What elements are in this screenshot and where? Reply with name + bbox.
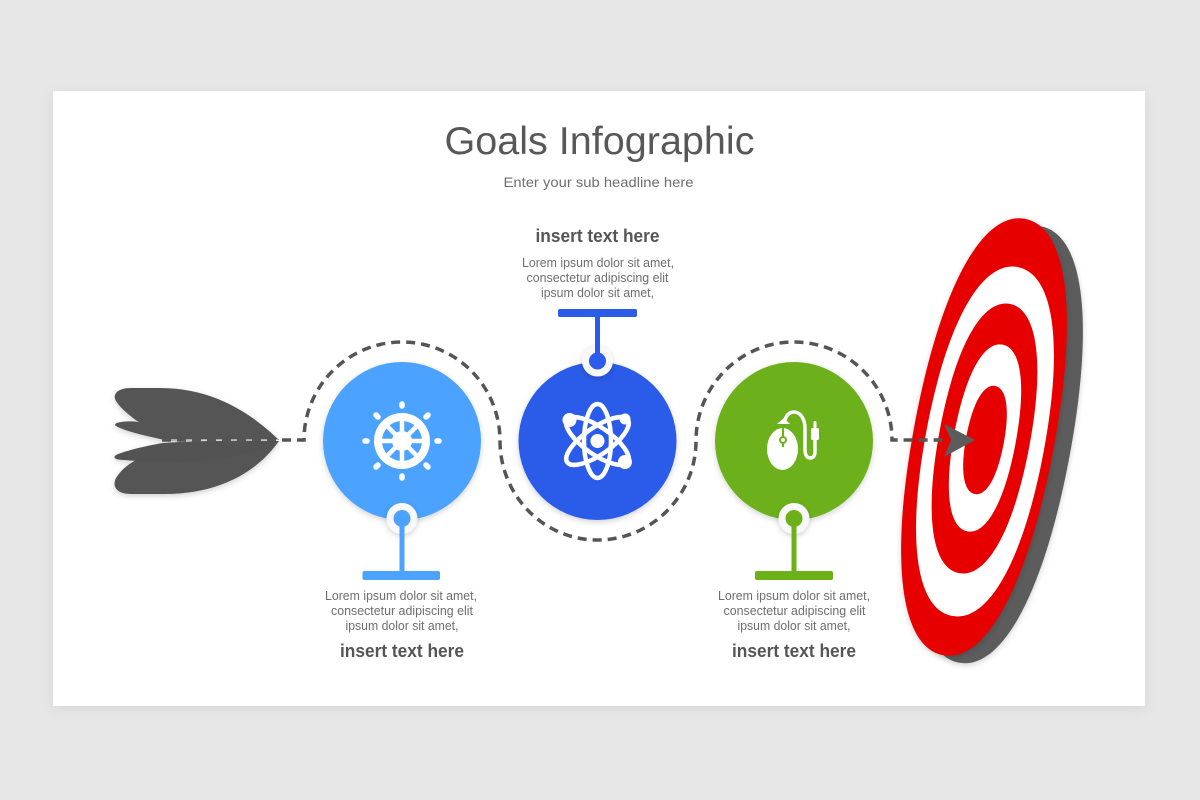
text block: left step: ipsum dolor sit amet, (346, 619, 458, 633)
icon: atom (559, 404, 636, 478)
text block: top step (522, 226, 674, 300)
text block: left step (325, 589, 477, 661)
arrowhead (944, 424, 975, 457)
connector: blue pin (362, 503, 440, 580)
circle: step three green (715, 362, 873, 520)
text block: left step: Lorem ipsum dolor sit amet, (325, 589, 477, 603)
panel: white slide card (53, 91, 1145, 706)
title: Goals Infographic (444, 120, 754, 163)
circle: step one blue (323, 362, 481, 520)
text block: top step: Lorem ipsum dolor sit amet, (522, 256, 674, 270)
text block: top step: ipsum dolor sit amet, (541, 286, 654, 300)
text block: top step: consectetur adipiscing elit (526, 271, 669, 285)
connector: green pin (755, 503, 833, 580)
text block: right step: consectetur adipiscing elit (724, 604, 866, 618)
icon: target board (874, 206, 1110, 676)
subtitle: Enter your sub headline here (504, 174, 694, 190)
icon: computer mouse (767, 412, 819, 470)
text block: left step: insert text here (340, 641, 464, 661)
text block: left step: consectetur adipiscing elit (331, 604, 474, 618)
icon: ship wheel (365, 404, 439, 478)
text block: right step: insert text here (732, 641, 856, 661)
text block: top step: insert text here (536, 226, 660, 246)
circle: step two dark blue (518, 362, 676, 520)
connector: dark blue pin (558, 309, 637, 376)
arrow: dashed path from dart to target (162, 342, 948, 540)
text block: right step (718, 589, 870, 661)
icon: dart feathers (114, 388, 279, 494)
text block: right step: Lorem ipsum dolor sit amet, (718, 589, 870, 603)
text block: right step: ipsum dolor sit amet, (738, 619, 850, 633)
